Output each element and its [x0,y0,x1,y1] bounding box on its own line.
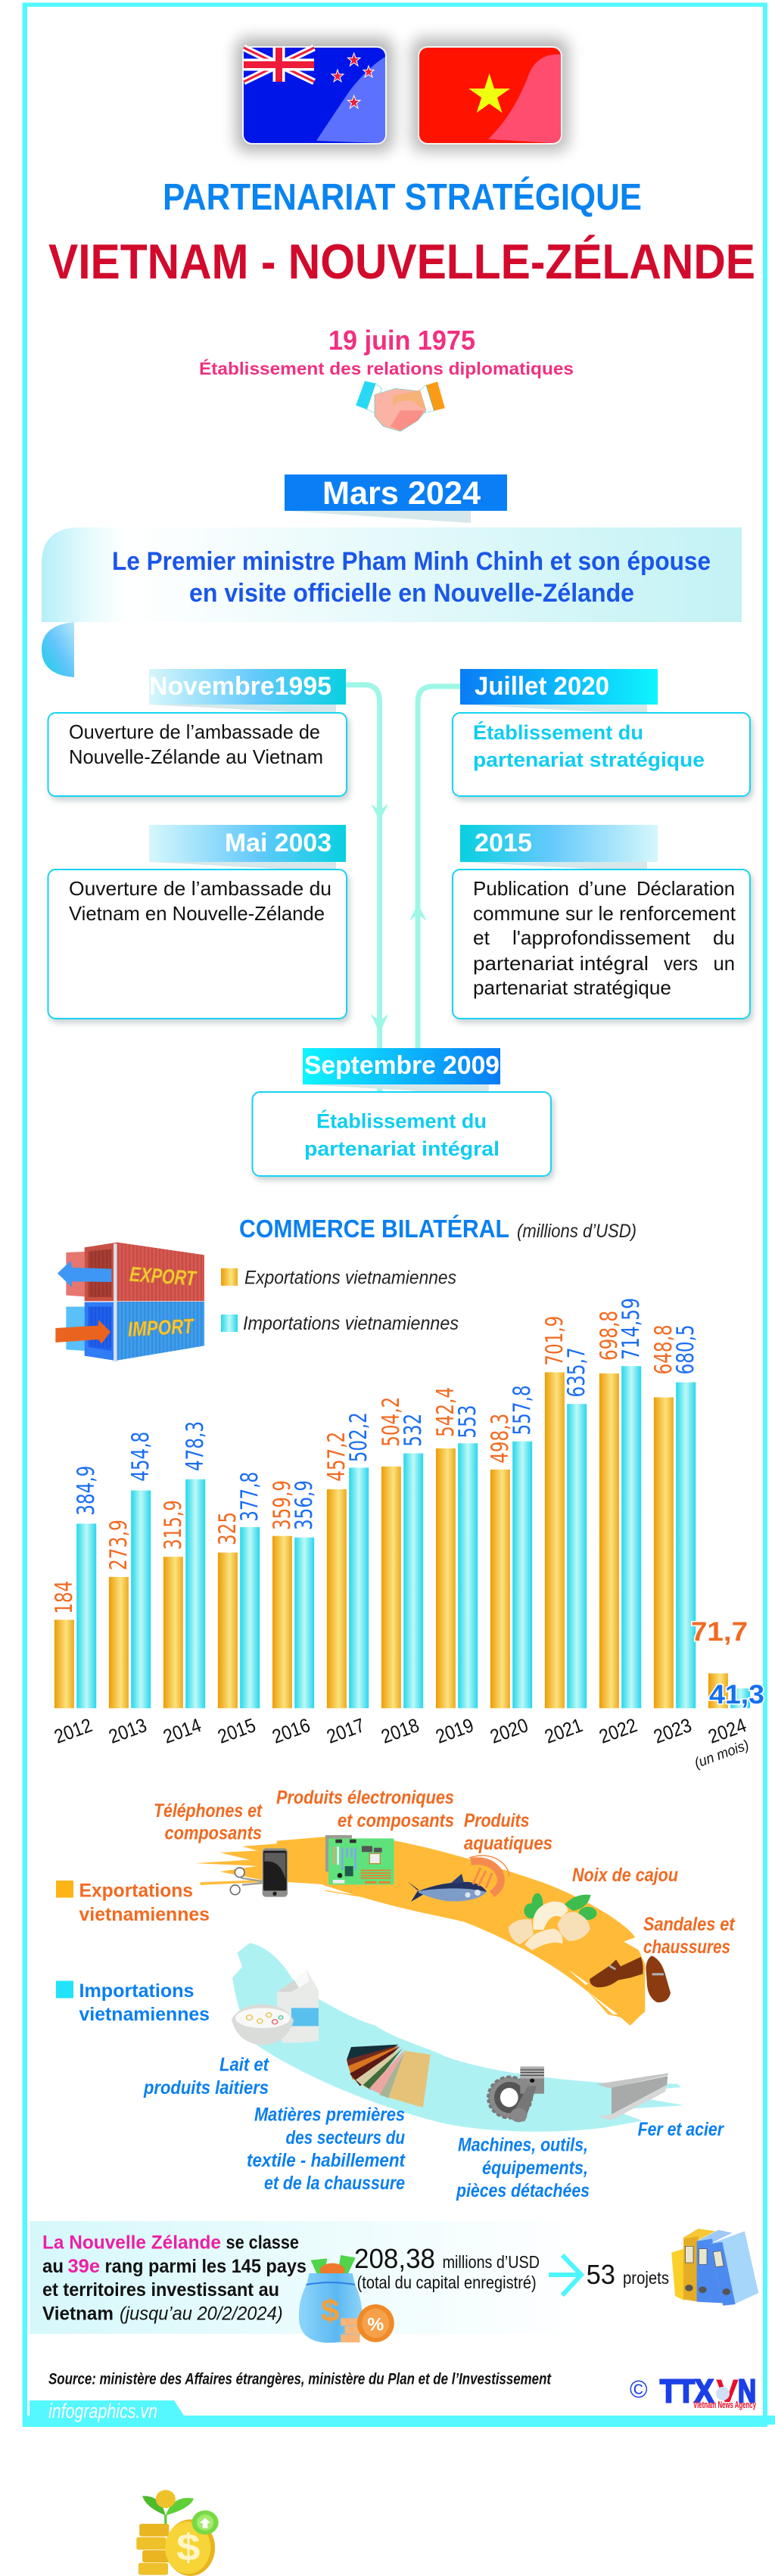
bars 2016: 2016 [269,1713,313,1748]
bars 2017 [323,1412,372,1748]
timeline: Juillet 2020: Établissement du [473,720,643,744]
investment rank text: se classe [226,2232,299,2254]
timeline: Mai 2003 [48,825,347,1019]
capital figure: (total du capital enregistré) [357,2273,537,2292]
source: Source: ministère des Affaires étrangères, ministère du Plan et de l’Investissement [48,2371,552,2388]
title [48,177,755,289]
icon: milk and cereal [232,1970,319,2046]
timeline: 2015: et [473,926,490,949]
bars 2021: 635,7 [563,1347,590,1397]
timeline: Septembre 2009: Établissement du [316,1109,487,1132]
heading: Mars 2024: Mars 2024 [322,475,481,512]
icon: growing coins: $ [176,2527,201,2568]
timeline: 2015: partenariat stratégique [473,976,671,999]
banner: official visit [42,527,742,677]
bars 2022: 2022 [596,1713,640,1748]
icon: export import containers: IMPORT [127,1314,195,1341]
investment rank text: La Nouvelle Zélande [42,2232,221,2254]
banner: official visit: Le Premier ministre Pham Minh Chinh et son épouse [112,547,711,576]
labels: import products [143,2055,724,2201]
capital figure: 208,38 [354,2243,435,2274]
bars 2021 [541,1316,590,1748]
labels: import products: Matières premières [254,2104,405,2125]
bars 2013 [105,1432,154,1748]
icon: handshake [356,381,445,431]
timeline: Juillet 2020: partenariat stratégique [473,748,705,771]
bars 2020: 557,8 [509,1385,536,1435]
arrow [549,2255,581,2295]
logo: TTXVN [630,2373,756,2410]
bars 2018 [378,1397,427,1748]
date: diplomatic relations: 19 juin 1975 [328,325,475,356]
labels: export products: composants [165,1823,262,1844]
icon: money bag: % [367,2314,384,2335]
timeline: Novembre 1995: Novembre1995 [149,672,331,701]
timeline: 2015: partenariat intégral [473,952,649,975]
investment rank text: et territoires investissant au [42,2279,279,2301]
bars 2012 [51,1466,100,1748]
labels: import products: pièces détachées [456,2180,590,2201]
icon: export import containers [55,1243,204,1361]
bars 2015 [214,1472,263,1748]
logo: TTXVN: V [716,2373,739,2410]
bars 2019: 553 [454,1405,481,1439]
bars 2013: 273,9 [105,1520,132,1570]
timeline: 2015: Publication [473,877,569,900]
brush: imports [232,1943,685,2132]
timeline: Mai 2003: Ouverture de l’ambassade du [69,877,331,900]
investment rank text: Vietnam [42,2304,114,2325]
title: PARTENARIAT STRATÉGIQUE [163,177,642,218]
label: exports: vietnamiennes [79,1904,210,1925]
timeline: Novembre 1995: Nouvelle-Zélande au Vietnam [69,745,323,768]
labels: export products: Noix de cajou [572,1865,678,1886]
icon: binders [671,2229,758,2306]
timeline: Novembre 1995 [48,669,347,796]
label: imports: Importations [79,1980,194,2002]
bars 2022 [596,1298,645,1748]
date: diplomatic relations [199,325,574,378]
labels: export products: chaussures [643,1937,730,1958]
icon: fabric swatches [347,2045,431,2108]
bars 2019 [432,1387,481,1748]
capital figure [354,2243,540,2292]
timeline arrows [346,685,460,1092]
labels: import products: et de la chaussure [264,2173,405,2194]
timeline: 2015: commune sur le renforcement [473,902,736,925]
bars 2016 [269,1480,318,1748]
legend: exports: Exportations vietnamiennes [244,1267,456,1288]
icon: shoes [590,1955,671,2002]
bars 2013: 2013 [106,1713,150,1748]
label: exports: Exportations [79,1880,193,1901]
date: diplomatic relations: Établissement des relations diplomatiques [199,358,574,378]
bars 2024: 2024 [705,1713,749,1748]
bars 2020 [487,1385,536,1748]
timeline: 2015 [453,825,750,1019]
bars 2024: 41,3 [709,1680,764,1710]
flag: Vietnam [412,38,568,151]
bars 2022: 698,8 [596,1311,623,1361]
bars 2014: 2014 [160,1713,204,1748]
timeline: 2015: du [713,926,735,949]
icon: gear and piston [488,2067,544,2122]
timeline: 2015: 2015 [475,829,532,857]
icon: phone and earphones [230,1848,288,1897]
projects figure [587,2259,669,2290]
bars 2012: 384,9 [73,1466,100,1516]
capital figure: millions d’USD [443,2252,540,2272]
icon: growing coins [136,2490,219,2576]
timeline: 2015: vers [664,952,698,975]
investment rank text: 39e [68,2256,100,2277]
projects figure: projets [623,2268,669,2288]
bars 2019: 542,4 [432,1387,459,1437]
labels: import products: équipements, [482,2158,588,2179]
heading: bilateral trade: COMMERCE BILATÉRAL [239,1215,509,1243]
timeline: 2015: un [713,952,735,975]
bars 2014 [160,1421,209,1748]
bars 2016: 356,9 [291,1480,318,1530]
legend: imports: Importations vietnamiennes [243,1313,459,1334]
bars 2014: 315,9 [160,1500,187,1550]
timeline: Juillet 2020 [453,669,750,796]
bars 2017: 2017 [324,1713,368,1748]
bars 2019: 2019 [433,1713,477,1748]
icon: money bag: $ [321,2293,340,2328]
bars 2015: 377,8 [236,1472,263,1522]
label: exports [56,1880,210,1925]
bars 2017: 457,2 [323,1432,350,1482]
labels: import products: Fer et acier [638,2119,724,2140]
bars 2023: 2023 [651,1713,695,1748]
bars 2021: 701,9 [541,1316,568,1366]
timeline: Septembre 2009: Septembre 2009 [304,1051,500,1080]
logo: TTXVN: © [630,2375,648,2403]
bars 2023: 680,5 [672,1324,699,1374]
timeline: 2015: l'approfondissement [512,926,691,949]
bars 2014: 478,3 [182,1421,209,1471]
bar chart [51,1298,764,1772]
bars 2024 [691,1617,764,1772]
brush: exports [195,1837,645,2026]
investment rank text: (jusqu’au 20/2/2024) [120,2304,283,2325]
bars 2024: 71,7 [691,1617,748,1647]
investment rank text: au [42,2256,64,2277]
label: imports [56,1980,210,2025]
footer tab: infographics.vn [48,2400,157,2422]
bars 2020: 2020 [487,1713,531,1748]
bars 2023: 648,8 [650,1324,677,1374]
bars 2021: 2021 [542,1713,586,1748]
icon: shrimp [469,1856,509,1894]
flags [236,38,568,151]
bars 2012: 184 [51,1581,78,1614]
investment rank text [42,2232,307,2325]
panel: investment [30,2221,758,2343]
labels: import products: des secteurs du [286,2127,405,2148]
bars 2012: 2012 [51,1713,95,1748]
legend [221,1267,459,1334]
logo: TTXVN: TTX [660,2373,714,2410]
heading: bilateral trade: (millions d’USD) [517,1221,636,1242]
timeline: Mai 2003: Mai 2003 [225,829,331,857]
timeline: Juillet 2020: Juillet 2020 [475,672,609,701]
label: imports: vietnamiennes [79,2004,210,2025]
logo: TTXVN: N [738,2373,756,2410]
labels: export products: Produits [464,1810,530,1831]
bars 2016: 359,9 [269,1480,296,1530]
timeline: 2015: Déclaration [636,877,735,900]
labels: import products: produits laitiers [143,2077,269,2098]
bars 2013: 454,8 [127,1432,154,1482]
labels: export products: Sandales et [643,1914,736,1935]
labels: import products: textile - habillement [247,2150,406,2171]
icon: steel beam [596,2073,668,2120]
labels: import products: Machines, outils, [458,2134,588,2155]
timeline: Septembre 2009 [253,1048,551,1176]
icon: export import containers: EXPORT [129,1262,198,1290]
icon: money bag [299,2255,394,2343]
bars 2020: 498,3 [487,1414,514,1464]
labels: export products [154,1787,736,1958]
labels: export products: Produits électroniques [276,1787,454,1809]
bars 2023 [650,1324,699,1748]
bars 2022: 714,59 [618,1298,645,1360]
investment rank text: rang parmi les 145 pays [104,2256,307,2277]
flag: New Zealand [236,38,393,151]
timeline: 2015: d’une [578,877,627,900]
icon: circuit board [325,1835,394,1884]
labels: import products: Lait et [219,2055,269,2076]
labels: export products: Téléphones et [154,1800,263,1822]
icon: tuna [407,1874,487,1902]
bars 2017: 502,2 [345,1412,372,1462]
bars 2024: (un mois) [693,1738,752,1772]
heading: Mars 2024 [285,474,507,523]
bars 2015: 325 [214,1512,241,1545]
banner: official visit: en visite officielle en Nouvelle-Zélande [189,579,634,608]
timeline: Mai 2003: Vietnam en Nouvelle-Zélande [69,902,325,925]
bars 2018: 532 [400,1414,427,1447]
bars 2015: 2015 [215,1713,259,1748]
labels: export products: et composants [338,1810,454,1831]
bars 2018: 504,2 [378,1397,405,1447]
projects figure: 53 [587,2259,615,2290]
bars 2018: 2018 [378,1713,422,1748]
icon: cashews [509,1893,597,1950]
timeline: Septembre 2009: partenariat intégral [304,1137,500,1160]
labels: export products: aquatiques [464,1833,552,1854]
timeline: Novembre 1995: Ouverture de l’ambassade de [69,720,320,743]
